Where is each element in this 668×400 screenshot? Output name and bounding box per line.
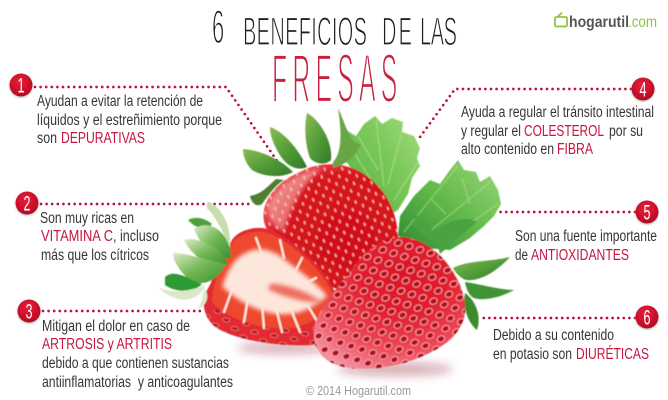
- benefit 4 text: por su: [609, 123, 643, 140]
- benefit 2 text: más que los cítricos: [41, 247, 149, 264]
- benefit 3 text: [42, 318, 233, 391]
- title line: 6 beneficios de las: DE: [382, 8, 412, 54]
- badge 1: [10, 74, 32, 98]
- benefit 4 text: alto contenido en: [461, 141, 554, 158]
- benefit 2 text: [40, 210, 159, 264]
- benefit 6 text: DIURÉTICAS: [576, 346, 649, 363]
- shadow under fruit: [237, 343, 453, 375]
- badge 6: 6: [644, 306, 650, 330]
- title: [212, 1, 457, 117]
- logo: hogarutil.com: [555, 12, 657, 31]
- large leaf upper: [345, 116, 420, 216]
- badge 5: 5: [644, 202, 650, 224]
- logo text: .com: [628, 14, 657, 31]
- strawberries illustration: [158, 108, 514, 375]
- benefit 4 text: FIBRA: [557, 141, 594, 158]
- badge 4: [632, 78, 654, 102]
- benefit 4 text: COLESTEROL: [524, 123, 604, 140]
- icon: house: [555, 12, 567, 26]
- dotted line 2: [41, 203, 250, 205]
- benefit 5 text: de: [515, 247, 528, 264]
- half strawberry: [200, 228, 336, 350]
- front strawberry: [314, 237, 465, 369]
- badge 4: 4: [640, 78, 647, 102]
- copyright: © 2014 Hogarutil.com: [306, 384, 411, 398]
- title line: 6 beneficios de las: 6: [212, 1, 224, 53]
- large leaf lower: [398, 160, 501, 250]
- benefit 1 text: líquidos y el estreñimiento porque: [37, 112, 222, 129]
- benefit 2 text: , incluso: [113, 228, 159, 245]
- badge 5: [636, 200, 658, 224]
- badge 1: 1: [18, 74, 24, 98]
- benefit 3 text: debido a que contienen sustancias: [42, 355, 229, 372]
- badge 6: [636, 306, 658, 330]
- badge 3: [18, 300, 40, 324]
- dotted line 6: [480, 317, 635, 319]
- dotted line 4: [420, 89, 631, 137]
- dotted line 1: [35, 87, 280, 165]
- benefit 6 text: Debido a su contenido: [493, 327, 614, 344]
- benefit 6 text: [493, 327, 649, 363]
- benefit 1 text: son: [37, 130, 57, 147]
- benefit 3 text: antiinflamatorias y anticoagulantes: [42, 374, 233, 391]
- badge 2: [16, 192, 38, 216]
- benefit 6 text: en potasio son: [493, 346, 572, 363]
- top strawberry calyx: [243, 108, 361, 205]
- dotted line 5: [498, 211, 635, 213]
- benefit 2 text: VITAMINA C: [41, 228, 113, 245]
- title line: 6 beneficios de las: LAS: [420, 8, 457, 54]
- benefit 4 text: y regular el: [461, 123, 521, 140]
- logo text: hogarutil: [569, 14, 629, 31]
- benefit 1 text: [37, 93, 222, 147]
- top strawberry: [263, 164, 398, 290]
- benefit 3 text: Mitigan el dolor en caso de: [42, 318, 190, 335]
- benefit 5 text: ANTIOXIDANTES: [531, 247, 629, 264]
- benefit 1 text: Ayudan a evitar la retención de: [37, 93, 203, 110]
- half strawberry calyx: [158, 202, 231, 309]
- front strawberry calyx: [414, 213, 514, 330]
- title line: 6 beneficios de las: BENEFICIOS: [243, 8, 367, 54]
- title line: 6 beneficios de las: [212, 1, 457, 54]
- badge 2: 2: [24, 192, 30, 216]
- benefit 5 text: [515, 228, 657, 264]
- benefit 1 text: DEPURATIVAS: [61, 130, 145, 147]
- benefit 2 text: Son muy ricas en: [40, 210, 134, 227]
- benefit 4 text: [461, 104, 654, 158]
- title word: fresas: FRESAS: [272, 39, 397, 117]
- badge 3: 3: [26, 300, 32, 324]
- connector lines: [35, 87, 635, 318]
- benefit 3 text: ARTROSIS y ARTRITIS: [42, 336, 172, 353]
- dotted line 3: [43, 310, 201, 312]
